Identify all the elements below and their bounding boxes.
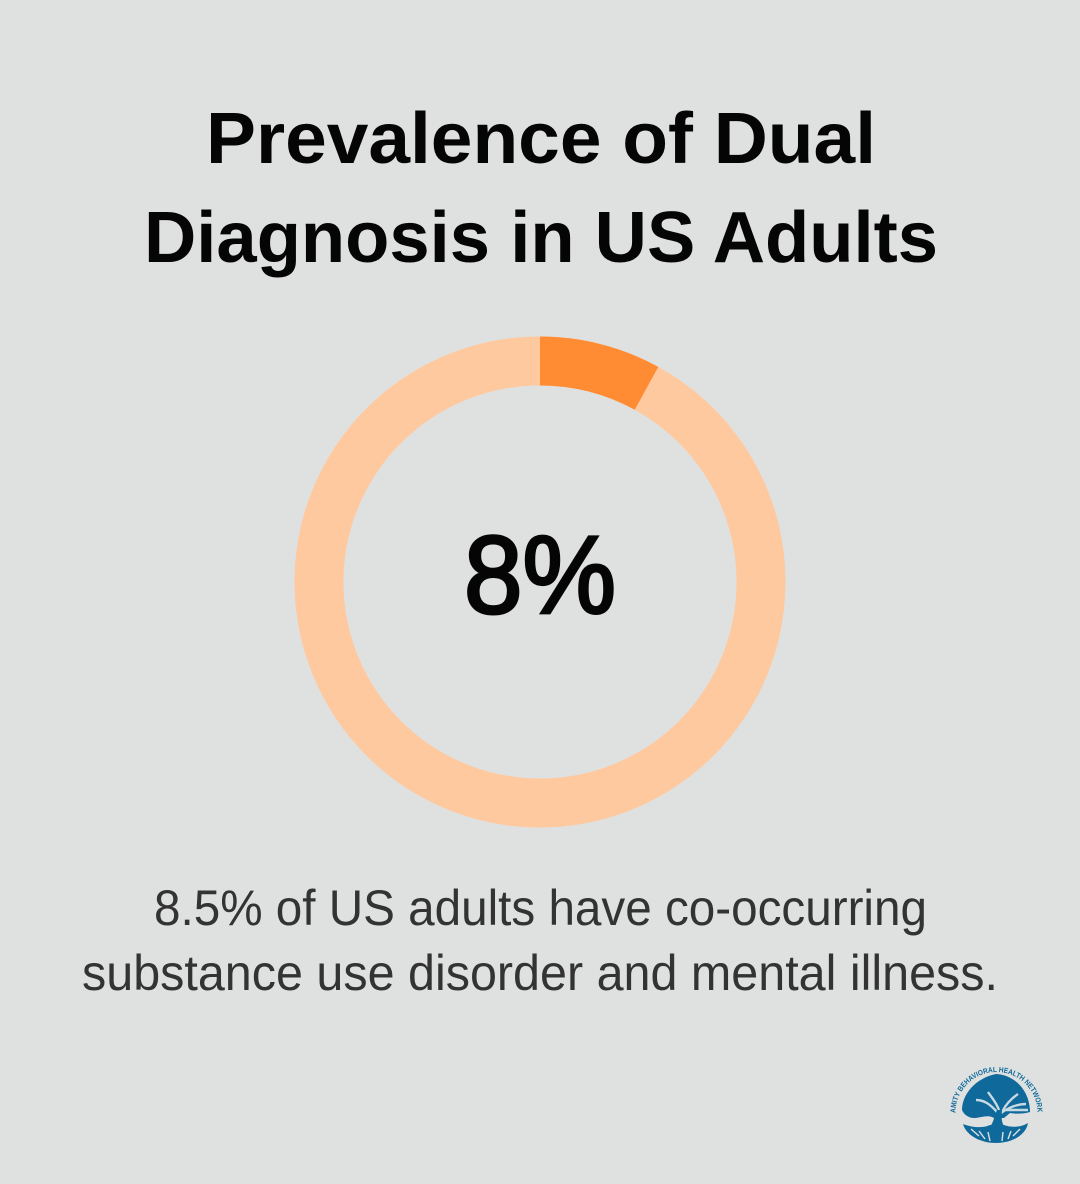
logo roots bowl <box>963 1123 1028 1143</box>
logo tree branches <box>976 1092 1028 1113</box>
title <box>144 99 938 278</box>
logo tree trunk <box>986 1110 1008 1130</box>
description text: 8.5% of US adults have co-occurring <box>154 880 927 936</box>
title: Prevalence of Dual <box>206 99 876 179</box>
logo ring text: AMITY BEHAVIORAL HEALTH NETWORK <box>950 1067 1043 1113</box>
donut value: 8% <box>464 514 616 637</box>
description text <box>82 880 998 1001</box>
description text: substance use disorder and mental illness. <box>82 945 998 1001</box>
logo tree canopy <box>962 1074 1030 1118</box>
title: Diagnosis in US Adults <box>144 198 938 278</box>
logo: Amity Behavioral Health Network <box>950 1067 1043 1143</box>
donut chart <box>319 361 761 803</box>
